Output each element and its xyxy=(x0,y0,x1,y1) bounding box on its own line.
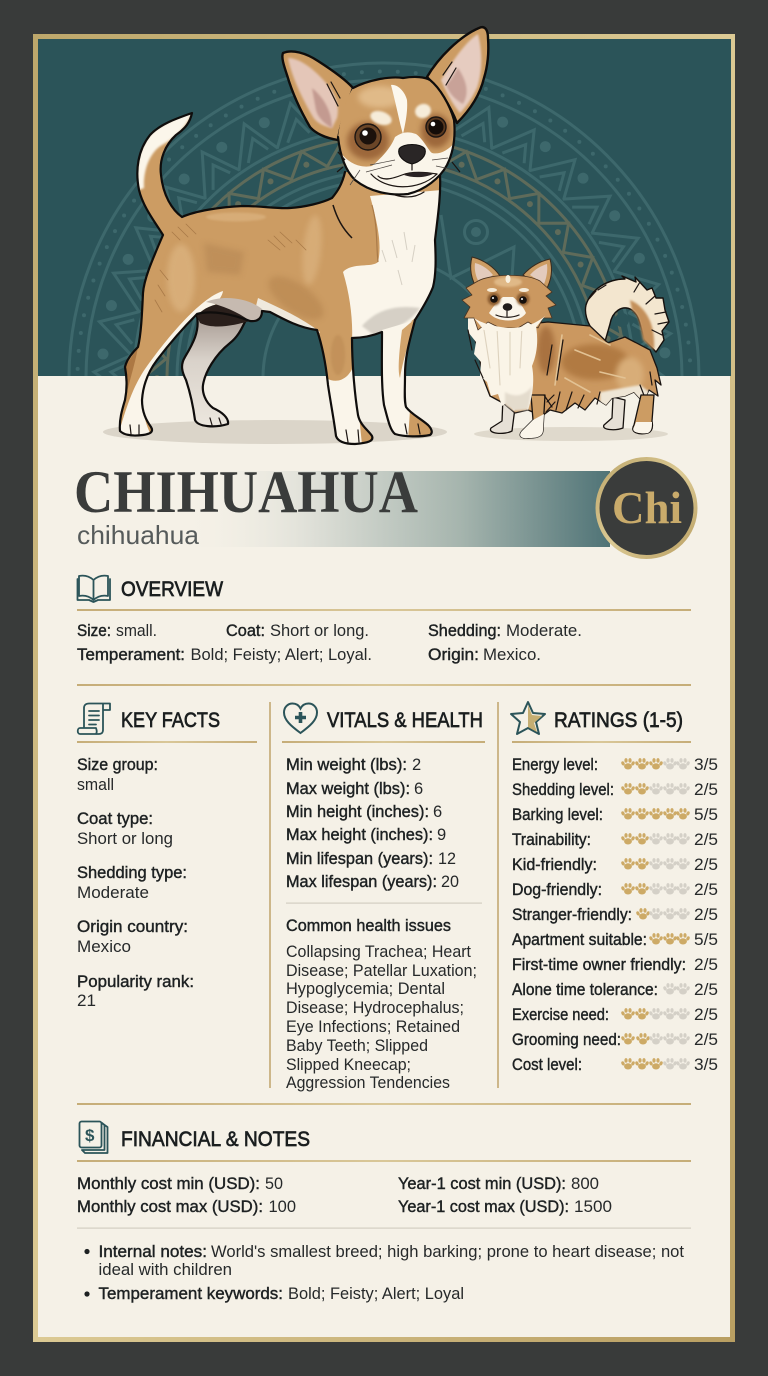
key facts list: Moderate xyxy=(77,884,149,902)
icon: banknotes: $ xyxy=(85,1126,95,1145)
section: financial and notes xyxy=(77,1122,691,1303)
section: vitals and health xyxy=(282,704,485,1092)
far hind leg xyxy=(182,316,247,426)
common health issues: Baby Teeth; Slipped xyxy=(286,1037,428,1055)
eyes xyxy=(355,117,446,150)
overview facts: Moderate. xyxy=(506,622,582,640)
notes list xyxy=(84,1243,684,1303)
illustration: long-haired chihuahua xyxy=(462,257,669,438)
header teal panel xyxy=(38,39,731,376)
notes list: ideal with children xyxy=(98,1261,232,1279)
mouth and whiskers xyxy=(378,164,437,179)
cost figures: Monthly cost max (USD): xyxy=(77,1198,263,1216)
key facts list: Size group: xyxy=(77,756,158,774)
vitals list: Min lifespan (years): xyxy=(286,850,433,868)
ratings labels: Grooming need: xyxy=(512,1031,621,1049)
overview facts: Mexico. xyxy=(483,646,541,664)
cost figures: Monthly cost min (USD): xyxy=(77,1175,260,1193)
key facts list xyxy=(77,756,194,1010)
vitals list: 2 xyxy=(412,756,421,774)
ratings labels: Kid-friendly: xyxy=(512,856,597,874)
ratings heading: RATINGS (1-5) xyxy=(554,708,683,732)
ratings labels: Energy level: xyxy=(512,756,598,774)
vitals list: Max weight (lbs): xyxy=(286,780,410,798)
overview facts: Size: xyxy=(77,622,111,640)
illustration: short-haired chihuahua xyxy=(118,27,488,447)
mandala pattern xyxy=(68,62,700,376)
overview facts: Origin: xyxy=(428,646,479,664)
icon: star xyxy=(511,702,545,734)
common health issues: Eye Infections; Retained xyxy=(286,1018,460,1036)
notes list: Bold; Feisty; Alert; Loyal xyxy=(288,1285,464,1303)
ratings values: 5/5 xyxy=(694,806,718,824)
vitals list: 12 xyxy=(438,850,456,868)
ratings values: 2/5 xyxy=(694,856,718,874)
ratings labels: Exercise need: xyxy=(512,1006,609,1024)
cost figures: 1500 xyxy=(574,1198,612,1216)
front legs xyxy=(520,395,654,438)
vitals list: 6 xyxy=(414,780,423,798)
key facts list: Short or long xyxy=(77,830,173,848)
cost figures xyxy=(77,1175,612,1216)
overview facts: Temperament: xyxy=(77,646,185,664)
ratings values xyxy=(694,756,718,1074)
right ear xyxy=(427,27,488,123)
icon: banknotes xyxy=(80,1122,108,1153)
overview facts: Short or long. xyxy=(270,622,369,640)
ratings values: 2/5 xyxy=(694,956,718,974)
vitals list: 20 xyxy=(441,873,459,891)
vitals list: 6 xyxy=(433,803,442,821)
title banner gradient xyxy=(180,471,610,547)
key facts list: Mexico xyxy=(77,938,131,956)
key facts list: Coat type: xyxy=(77,810,153,828)
notes list: Temperament keywords: xyxy=(98,1285,283,1303)
white ruff xyxy=(468,316,537,411)
ratings paw icons xyxy=(621,758,690,1070)
common health issues: Collapsing Trachea; Heart xyxy=(286,943,471,961)
icon: heart with cross xyxy=(284,704,317,733)
ground shadow: large dog xyxy=(103,420,447,444)
common health issues: Hypoglycemia; Dental xyxy=(286,980,445,998)
cost figures: 50 xyxy=(265,1175,283,1193)
breed badge: Chi xyxy=(612,482,682,533)
ratings values: 2/5 xyxy=(694,881,718,899)
overview facts: Bold; Feisty; Alert; Loyal. xyxy=(190,646,372,664)
ratings labels: Trainability: xyxy=(512,831,591,849)
icon: scroll xyxy=(78,704,110,734)
ratings labels: Shedding level: xyxy=(512,781,614,799)
common health issues: Disease; Hydrocephalus; xyxy=(286,999,464,1017)
vitals list: Min height (inches): xyxy=(286,803,429,821)
left ear small dog xyxy=(471,257,500,290)
common health issues: Aggression Tendencies xyxy=(286,1074,450,1092)
key facts list: Origin country: xyxy=(77,918,188,936)
financial heading: FINANCIAL & NOTES xyxy=(121,1127,310,1151)
vitals heading: VITALS & HEALTH xyxy=(327,708,483,732)
ratings values: 2/5 xyxy=(694,781,718,799)
notes list: Internal notes: xyxy=(98,1243,207,1261)
right ear small dog xyxy=(523,259,551,290)
overview facts xyxy=(77,622,582,664)
breed subtitle: chihuahua xyxy=(77,520,200,550)
ratings labels: Dog-friendly: xyxy=(512,881,602,899)
ratings values: 2/5 xyxy=(694,981,718,999)
overview facts: Coat: xyxy=(226,622,265,640)
vitals list xyxy=(286,756,459,891)
ratings values: 3/5 xyxy=(694,756,718,774)
vitals list: Max lifespan (years): xyxy=(286,873,437,891)
ratings values: 5/5 xyxy=(694,931,718,949)
common health issues: Slipped Kneecap; xyxy=(286,1056,411,1074)
section: key facts xyxy=(77,704,257,1010)
notes list: World's smallest breed; high barking; prone to heart disease; not xyxy=(211,1243,684,1261)
cost figures: 800 xyxy=(571,1175,599,1193)
ratings labels: Barking level: xyxy=(512,806,603,824)
cost figures: Year-1 cost min (USD): xyxy=(398,1175,566,1193)
key facts list: Shedding type: xyxy=(77,864,187,882)
overview heading: OVERVIEW xyxy=(121,577,224,601)
overview facts: Shedding: xyxy=(428,622,501,640)
ground shadow: small dog xyxy=(474,427,668,441)
vitals list: 9 xyxy=(437,826,446,844)
nose xyxy=(399,144,425,164)
common health issues: Disease; Patellar Luxation; xyxy=(286,962,477,980)
ratings labels xyxy=(512,756,686,1074)
ratings values: 2/5 xyxy=(694,1006,718,1024)
common health issues xyxy=(286,917,477,1092)
ratings labels: Apartment suitable: xyxy=(512,931,647,949)
ratings values: 3/5 xyxy=(694,1056,718,1074)
vitals list: Max height (inches): xyxy=(286,826,433,844)
icon: open book xyxy=(78,576,110,602)
section: overview xyxy=(77,576,691,664)
section: ratings xyxy=(511,702,718,1074)
key facts list: 21 xyxy=(77,992,96,1010)
dog body xyxy=(118,112,442,447)
far legs xyxy=(490,397,625,433)
key facts list: small xyxy=(77,776,114,794)
common health issues: Common health issues xyxy=(286,917,451,935)
small dog head xyxy=(462,275,556,332)
breed badge xyxy=(598,459,696,557)
long-haired body xyxy=(472,322,661,416)
dog head xyxy=(337,77,460,200)
breed title: CHIHUAHUA xyxy=(74,459,418,525)
ratings labels: Alone time tolerance: xyxy=(512,981,658,999)
cost figures: Year-1 cost max (USD): xyxy=(398,1198,569,1216)
ratings labels: Stranger-friendly: xyxy=(512,906,632,924)
vitals list: Min weight (lbs): xyxy=(286,756,407,774)
key facts list: Popularity rank: xyxy=(77,973,194,991)
key facts heading: KEY FACTS xyxy=(121,708,220,732)
ratings labels: Cost level: xyxy=(512,1056,582,1074)
fluffy tail xyxy=(585,276,669,352)
ratings labels: First-time owner friendly: xyxy=(512,956,686,974)
ratings values: 2/5 xyxy=(694,1031,718,1049)
belly shadow and thigh flap xyxy=(197,303,250,327)
ratings values: 2/5 xyxy=(694,831,718,849)
overview facts: small. xyxy=(116,622,157,640)
cost figures: 100 xyxy=(268,1198,296,1216)
left ear xyxy=(282,51,353,140)
ratings values: 2/5 xyxy=(694,906,718,924)
